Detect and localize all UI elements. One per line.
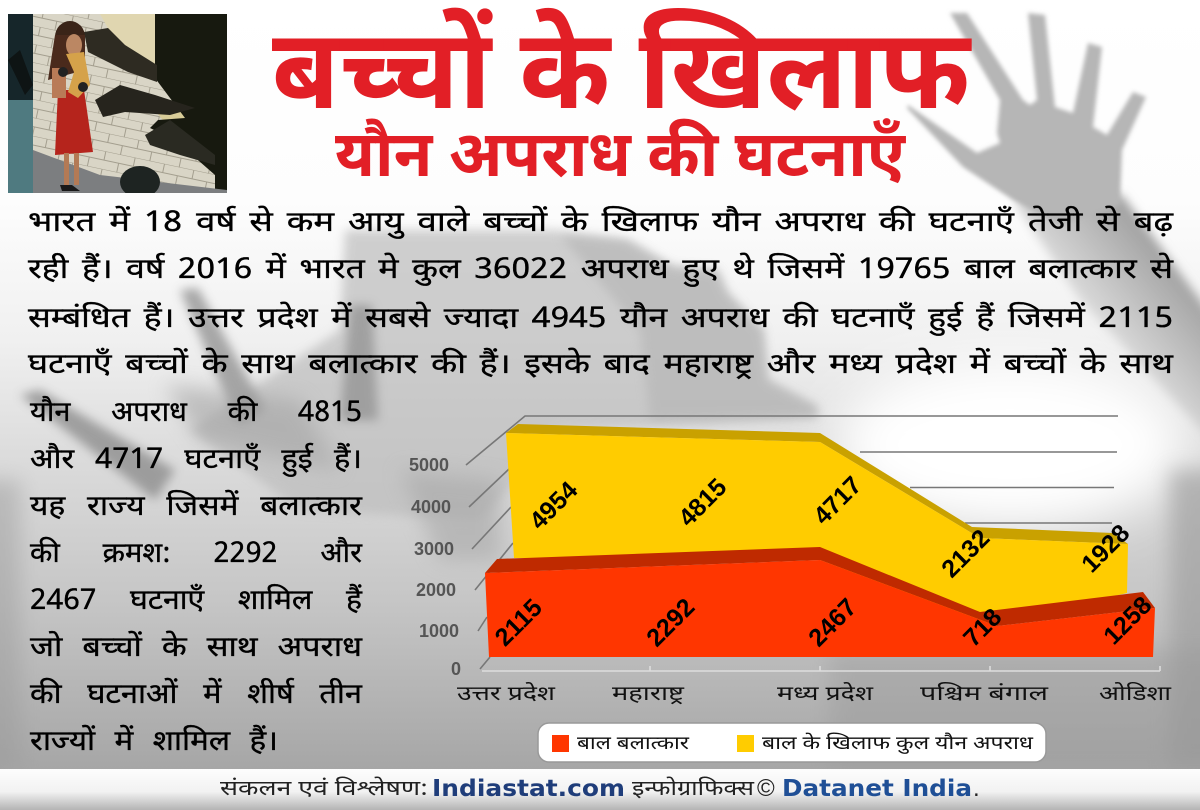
legend: [538, 723, 1046, 762]
legend item: total offences: बाल के खिलाफ कुल यौन अपराध: [762, 732, 1034, 757]
data labels: rape: [490, 591, 1157, 652]
data labels: rape: 1258: [1098, 591, 1157, 650]
photo: girl with teddy and shadow hands on brick wall: [8, 14, 227, 198]
data labels: total: 2132: [936, 524, 995, 583]
y axis values: 3000: [414, 539, 454, 559]
footer bar: Datanet India: [782, 776, 972, 802]
y axis values: 2000: [416, 580, 456, 600]
left column text block: यह राज्य जिसमें बलात्कार: [30, 489, 363, 527]
subtitle: यौन अपराध की घटनाएँ: [335, 117, 906, 203]
legend item: child rape: [552, 734, 690, 757]
x axis state labels: पश्चिम बंगाल: [920, 681, 1049, 709]
intro text block: [28, 205, 1175, 385]
footer bar: संकलन एवं विश्लेषण:: [220, 776, 428, 804]
footer bar: Indiastat.com: [432, 776, 625, 802]
intro text block: रही हैं। वर्ष 2016 में भारत मे कुल 36022 अपराध हुए थे जिसमें 19765 बाल बलात्कार से: [28, 252, 1174, 290]
left column text block: और 4717 घटनाएँ हुई हैं।: [30, 442, 362, 480]
left column text block: की क्रमश: 2292 और: [30, 536, 363, 574]
left column text block: यौन अपराध की 4815: [30, 395, 362, 433]
left column text block: 2467 घटनाएँ शामिल हैं: [30, 583, 363, 621]
x axis state labels: ओडिशा: [1099, 681, 1172, 709]
yellow area: total sexual offences: [506, 424, 1128, 625]
data labels: total: 4717: [808, 471, 867, 530]
left column text block: [30, 395, 363, 762]
footer bar: [0, 769, 1200, 810]
footer bar: .: [973, 775, 980, 802]
area chart: [409, 416, 1172, 709]
legend item: child rape: बाल बलात्कार: [577, 734, 690, 757]
data labels: total: [524, 471, 1135, 583]
x axis state labels: [457, 681, 1172, 709]
red area: child rape: [485, 547, 1155, 657]
y axis values: 0: [451, 659, 461, 679]
footer bar: ©: [757, 775, 775, 802]
title: बच्चों के खिलाफ: [272, 7, 972, 154]
data labels: total: 4954: [524, 476, 583, 535]
x axis state labels: मध्य प्रदेश: [777, 681, 874, 709]
y axis values: 5000: [409, 455, 449, 475]
data labels: total: 1928: [1076, 519, 1135, 578]
chart floor axis: [482, 666, 1160, 671]
legend item: total offences: [737, 732, 1034, 757]
intro text block: भारत में 18 वर्ष से कम आयु वाले बच्चों के खिलाफ यौन अपराध की घटनाएँ तेजी से बढ़: [28, 205, 1175, 243]
y axis values: 4000: [411, 497, 451, 517]
left column text block: जो बच्चों के साथ अपराध: [30, 630, 363, 668]
y axis values: [409, 455, 461, 679]
left column text block: की घटनाओं में शीर्ष तीन: [30, 677, 363, 715]
x axis state labels: उत्तर प्रदेश: [457, 681, 556, 709]
left column text block: राज्यों में शामिल हैं।: [30, 724, 278, 762]
x axis state labels: महाराष्ट्र: [612, 683, 684, 709]
data labels: rape: 2467: [803, 593, 862, 652]
intro text block: सम्बंधित हैं। उत्तर प्रदेश में सबसे ज्यादा 4945 यौन अपराध की घटनाएँ हुई हैं जिसमें 2115: [28, 301, 1173, 339]
intro text block: घटनाएँ बच्चों के साथ बलात्कार की हैं। इसके बाद महाराष्ट्र और मध्य प्रदेश में बच्चों के साथ: [28, 347, 1174, 385]
data labels: total: 4815: [673, 473, 732, 532]
footer bar: इन्फोग्राफिक्स: [632, 776, 755, 804]
data labels: rape: 718: [958, 603, 1007, 652]
data labels: rape: 2292: [641, 593, 700, 652]
y axis values: 1000: [419, 621, 459, 641]
data labels: rape: 2115: [490, 594, 548, 652]
chart gridlines: [466, 416, 1118, 669]
